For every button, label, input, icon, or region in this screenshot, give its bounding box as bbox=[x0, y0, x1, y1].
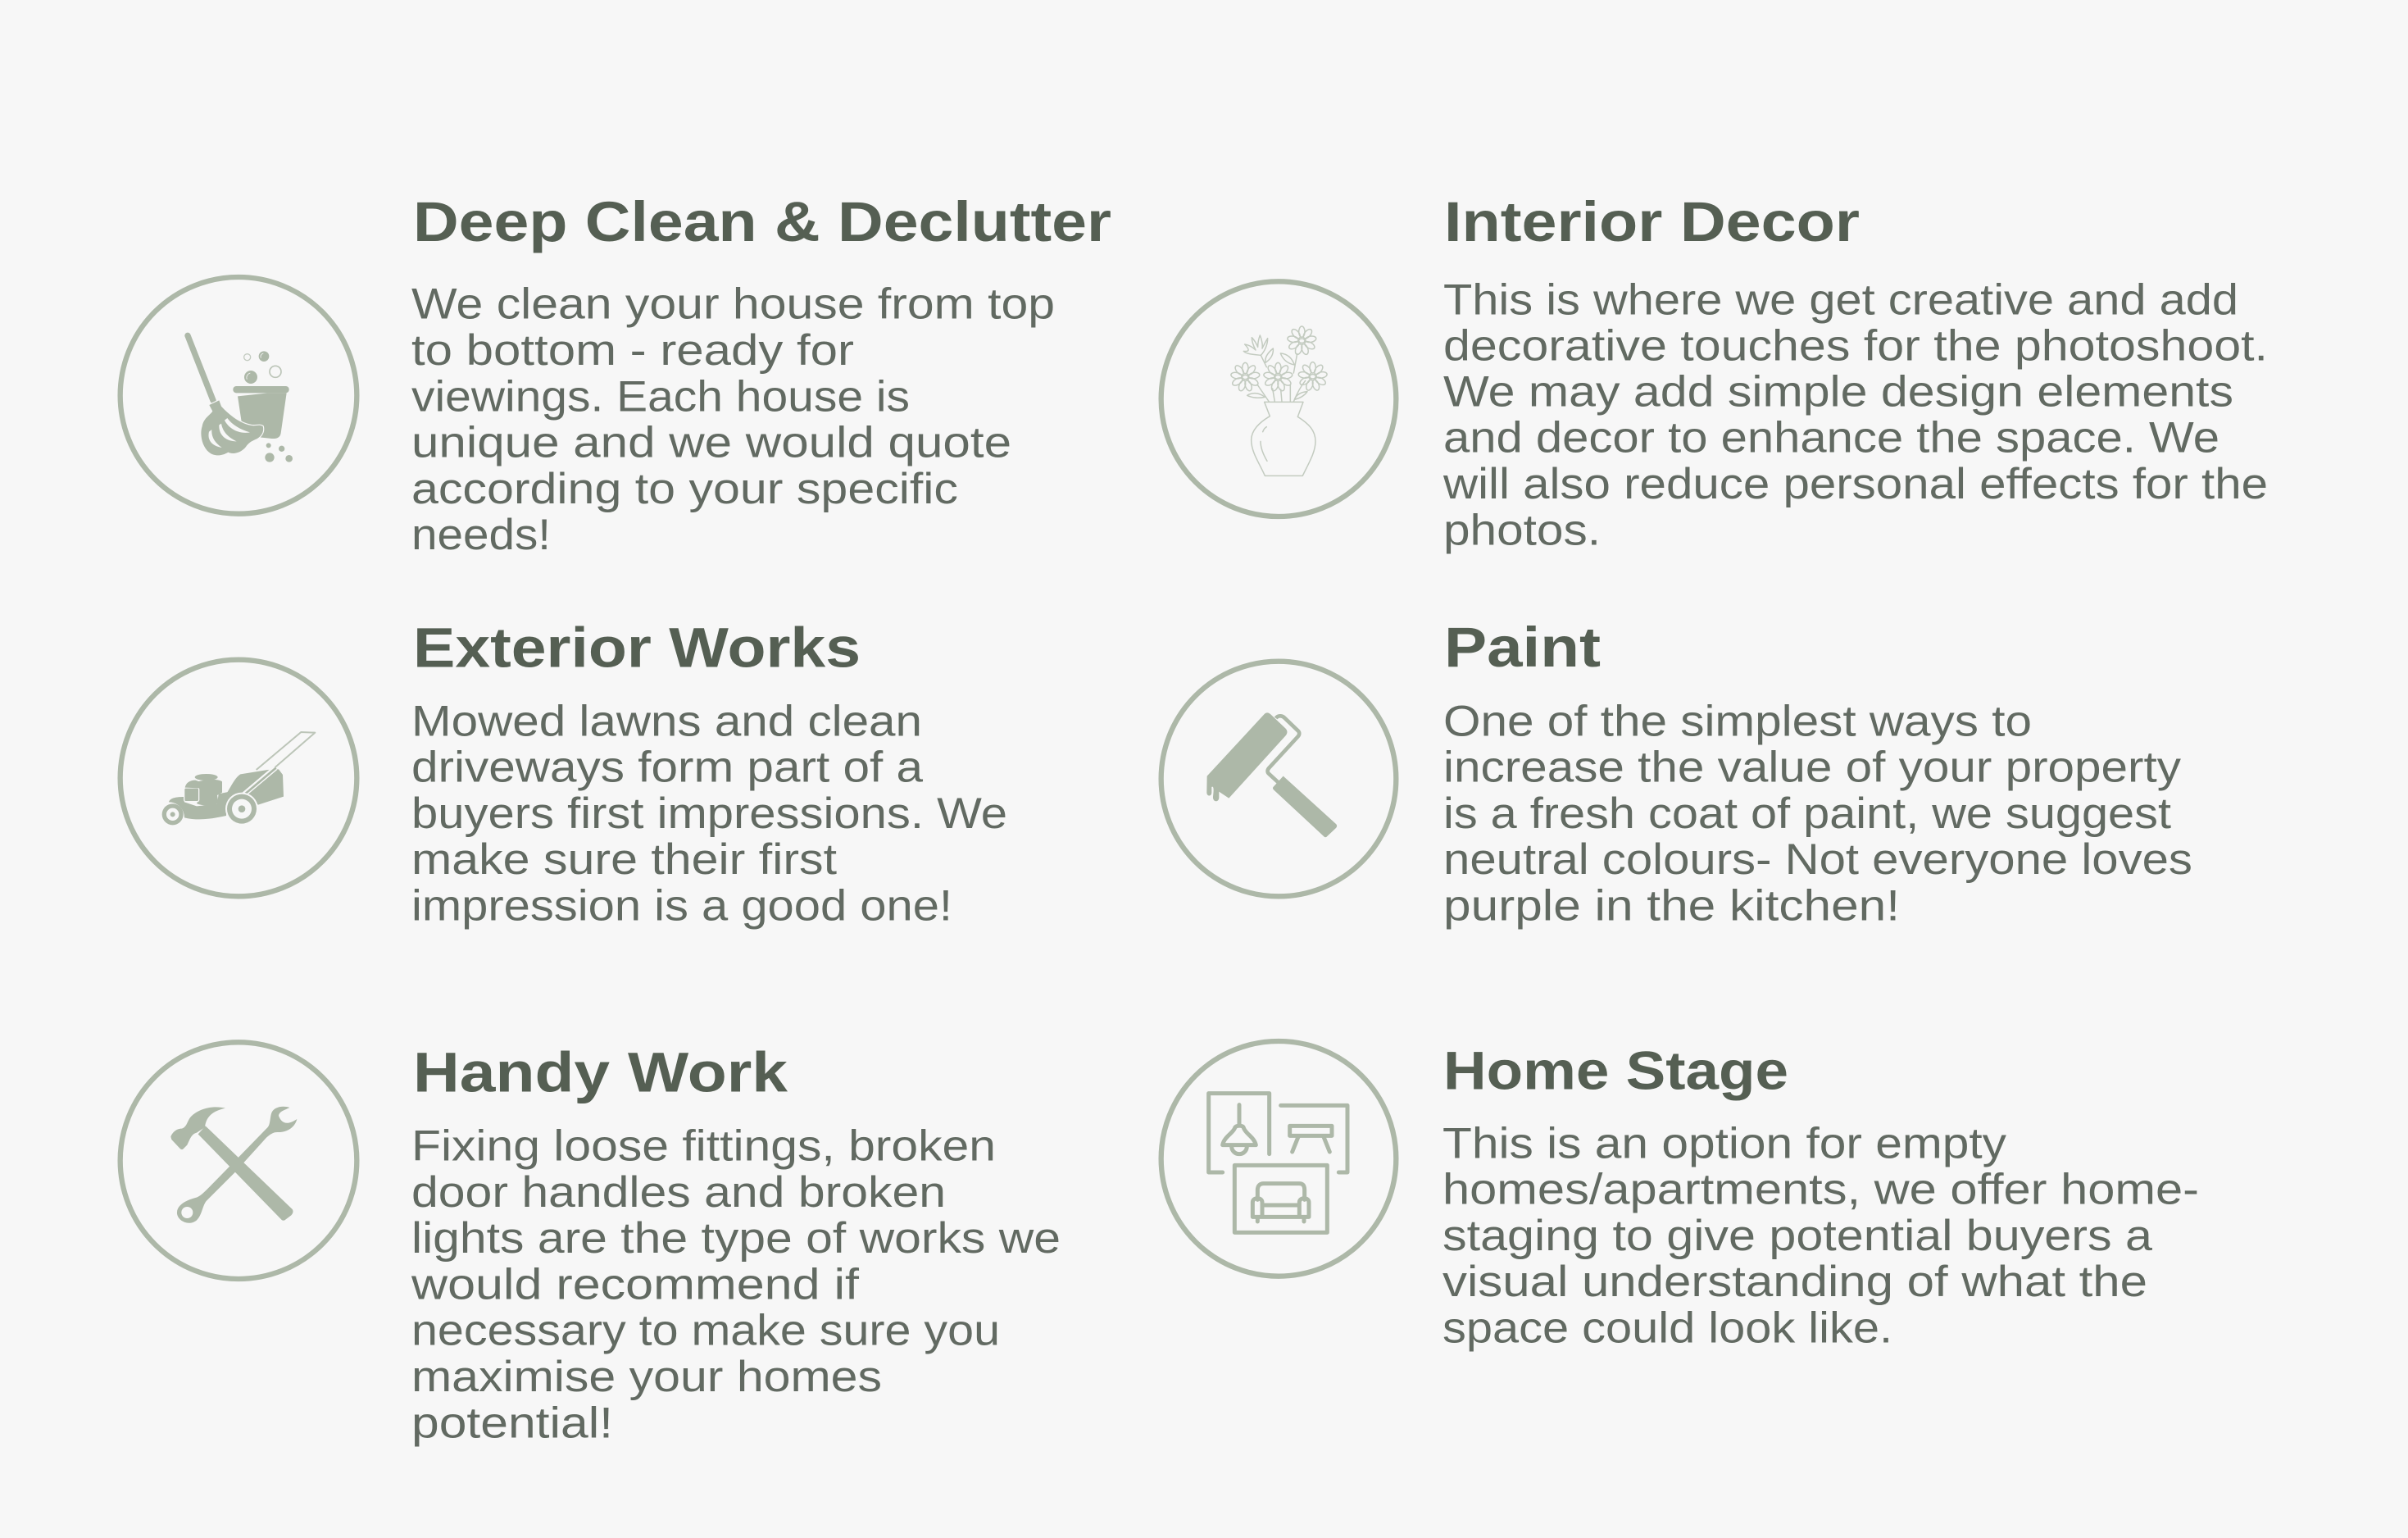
body text: neutral colours- Not everyone loves bbox=[1443, 835, 2192, 884]
body text: increase the value of your property bbox=[1443, 744, 2182, 792]
body text: We may add simple design elements bbox=[1443, 367, 2233, 416]
body text: homes/apartments, we offer home- bbox=[1443, 1166, 2199, 1214]
body text: potential! bbox=[411, 1399, 613, 1447]
icon: paint roller bbox=[1161, 662, 1396, 896]
heading: Handy Work bbox=[413, 1041, 788, 1104]
body text: needs! bbox=[411, 511, 551, 559]
body text: photos. bbox=[1443, 506, 1601, 554]
heading: Exterior Works bbox=[413, 616, 861, 679]
body text: driveways form part of a bbox=[411, 744, 924, 792]
body text: space could look like. bbox=[1443, 1304, 1892, 1352]
body text: would recommend if bbox=[411, 1260, 859, 1308]
body text bbox=[411, 697, 1007, 930]
panel: Handy Work bbox=[120, 1041, 1061, 1447]
panel: Deep Clean & Declutter bbox=[120, 190, 1111, 559]
heading: Interior Decor bbox=[1444, 190, 1860, 253]
body text bbox=[1443, 1120, 2199, 1352]
panel: Home Stage bbox=[1161, 1040, 2199, 1352]
body text: Fixing loose fittings, broken bbox=[411, 1122, 996, 1171]
body text: necessary to make sure you bbox=[411, 1307, 1000, 1355]
body text bbox=[411, 280, 1055, 559]
body text: impression is a good one! bbox=[411, 881, 952, 930]
icon: furnished rooms bbox=[1161, 1041, 1396, 1276]
body text: lights are the type of works we bbox=[411, 1214, 1061, 1263]
body text: door handles and broken bbox=[411, 1168, 946, 1217]
icon: flowers in vase bbox=[1161, 281, 1396, 516]
heading: Home Stage bbox=[1443, 1040, 1788, 1100]
body text: Mowed lawns and clean bbox=[411, 697, 922, 745]
panel: Paint bbox=[1161, 616, 2192, 930]
body text: decorative touches for the photoshoot. bbox=[1443, 321, 2268, 371]
body text: will also reduce personal effects for the bbox=[1443, 460, 2268, 508]
icon: lawn mower bbox=[120, 660, 357, 896]
body text bbox=[1443, 697, 2192, 930]
heading: Deep Clean & Declutter bbox=[413, 190, 1111, 253]
body text: This is an option for empty bbox=[1443, 1120, 2007, 1168]
body text: buyers first impressions. We bbox=[411, 789, 1007, 838]
body text: according to your specific bbox=[411, 465, 958, 513]
body text: is a fresh coat of paint, we suggest bbox=[1443, 789, 2171, 838]
body text bbox=[1443, 275, 2268, 554]
body text: maximise your homes bbox=[411, 1353, 882, 1401]
body text: and decor to enhance the space. We bbox=[1443, 414, 2219, 462]
icon: hammer and wrench bbox=[120, 1042, 357, 1279]
body text: to bottom - ready for bbox=[411, 326, 854, 375]
body text: unique and we would quote bbox=[411, 419, 1011, 467]
body text: One of the simplest ways to bbox=[1443, 697, 2032, 745]
body text: visual understanding of what the bbox=[1443, 1258, 2147, 1306]
body text: staging to give potential buyers a bbox=[1443, 1212, 2153, 1260]
body text: purple in the kitchen! bbox=[1443, 881, 1900, 930]
body text: We clean your house from top bbox=[411, 280, 1055, 329]
panel: Exterior Works bbox=[120, 616, 1007, 930]
panel: Interior Decor bbox=[1161, 190, 2268, 554]
heading: Paint bbox=[1444, 616, 1601, 679]
body text: This is where we get creative and add bbox=[1443, 275, 2238, 324]
body text: make sure their first bbox=[411, 835, 837, 884]
icon: mop and bucket bbox=[120, 277, 357, 514]
body text: viewings. Each house is bbox=[411, 372, 910, 421]
body text bbox=[411, 1122, 1061, 1447]
